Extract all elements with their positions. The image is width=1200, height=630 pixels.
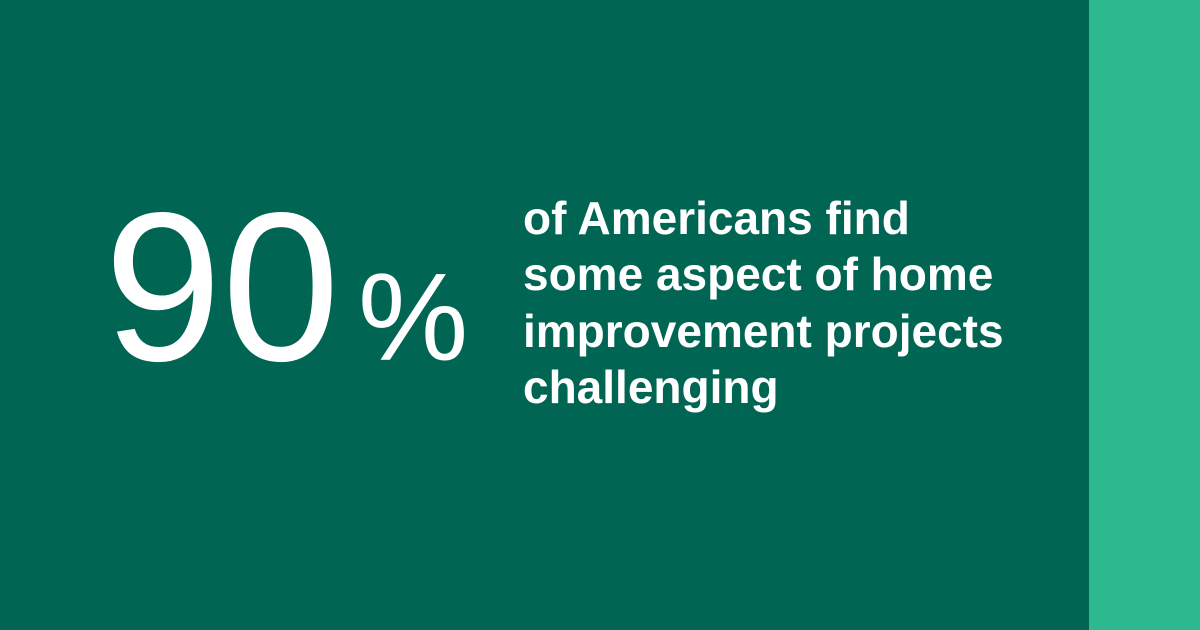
text block: description [523, 192, 1004, 413]
text block: description: some aspect of home [523, 248, 993, 300]
text block: description: of Americans find [523, 192, 910, 244]
big statistic: 90% [104, 168, 468, 405]
text block: description: challenging [523, 361, 779, 413]
percent sign: % [358, 249, 468, 387]
panel: light green side strip [1089, 0, 1200, 630]
text block: description: improvement projects [523, 305, 1004, 357]
number 90: 90 [104, 168, 340, 405]
